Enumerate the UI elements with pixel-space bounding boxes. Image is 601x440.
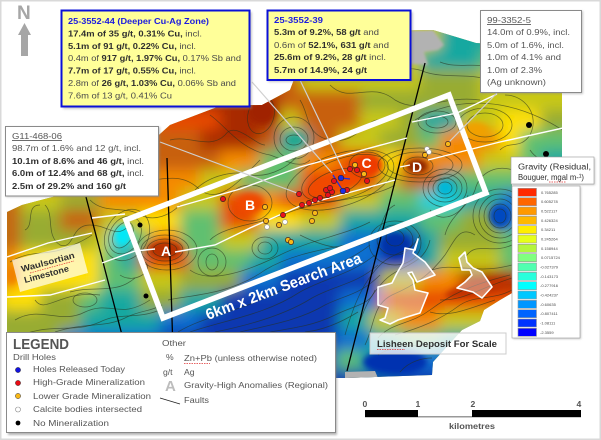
callout: 99-3352-5: 14.0m of 0.9%, incl. [487,27,570,37]
Lisheen label [370,333,506,354]
legend panel [6,332,337,435]
callout: G11-468-06 [6,126,160,197]
gravity anomaly labels: D [412,159,422,175]
drill holes key: High-Grade Mineralization [33,377,145,387]
drill holes key: Drill Holes [13,352,56,362]
Waulsortian Limestone label [12,243,88,292]
callout: 25-3552-44: 7.6m of 13 g/t, 0.41% Cu [68,90,172,100]
callout: 25-3552-39: 5.7m of 14.9%, 24 g/t [274,65,367,75]
north arrow [17,3,31,56]
callout: 25-3552-39: 25.6m of 9.2%, 28 g/t incl. [274,52,386,62]
callout: G11-468-06: G11-468-06 [12,131,62,141]
gravity colour scale: -2.3559 [540,330,554,335]
gravity colour scale: -0.143173 [540,274,559,279]
other key: g/t [163,367,173,377]
gravity colour scale: 0.34211 [541,227,556,232]
contour lines [10,62,562,372]
callout: G11-468-06: 2.5m of 29.2% and 160 g/t [12,181,126,191]
colour field [7,30,562,378]
blue drill traces [333,175,350,191]
gravity legend title: Gravity (Residual, [518,162,591,172]
other key [160,338,328,405]
callout: 25-3552-44: 5.1m of 91 g/t, 0.22% Cu, incl. [68,41,196,51]
callout: 25-3552-44: 0.4m of 917 g/t, 1.97% Cu, 0.17% Sb and [68,53,241,63]
gravity colour scale: 0.605278 [541,199,558,204]
gravity colour scale: -0.807411 [540,311,558,316]
gravity colour scale: -0.60635 [540,302,557,307]
scale bar: 4 [576,399,582,409]
gravity colour scale: -0.424237 [540,292,559,298]
gravity colour scale: -0.277916 [540,283,559,288]
other key: % [166,352,174,362]
callout: G11-468-06: 6.0m of 12.4% and 68 g/t, incl. [12,168,144,178]
callout: 25-3552-39: 5.3m of 9.2%, 58 g/t and [274,27,379,37]
callout: 25-3552-44: 17.4m of 35 g/t, 0.31% Cu, incl. [68,28,202,38]
gravity colour scale: -1.08111 [540,320,556,326]
other key: Faults [184,395,209,405]
gravity hot and cold spots [6,100,513,375]
gravity anomaly labels: C [362,155,372,171]
callout: 25-3552-39 [268,10,413,82]
callout: G11-468-06: 98.7m of 1.6% and 12 g/t, incl. [12,143,141,153]
callout: 25-3552-44: 7.7m of 17 g/t, 0.55% Cu, incl. [68,66,196,76]
other key: Gravity-High Anomalies (Regional) [184,380,328,390]
gravity colour scale: 0.765285 [541,190,558,195]
Waulsortian Limestone label: Waulsortian [20,250,76,274]
north arrow: N [17,3,31,24]
gravity colour scale: 0.426324 [541,218,558,223]
gravity colour scale: -0.027379 [540,264,559,270]
gravity colour scale [512,186,581,339]
other key: Zn+Pb (unless otherwise noted) [184,353,317,363]
drill holes key [13,352,151,428]
Lisheen label: Lisheen Deposit For Scale [377,339,497,350]
Waulsortian limestone white boundaries [7,94,563,297]
search area rectangle [126,95,486,318]
legend heading: LEGEND [13,337,69,353]
grey no-data wedge [412,30,445,66]
callout: 25-3552-44 [62,10,252,109]
drill hole markers [138,122,549,298]
drill holes key: No Mineralization [33,418,109,428]
callout: G11-468-06: 10.1m of 8.6% and 46 g/t, incl. [12,156,144,166]
callout: 25-3552-39: 0.6m of 52.1%, 631 g/t and [274,40,389,50]
scale bar: 1 [416,399,420,409]
gravity anomaly labels: A [161,243,171,259]
callout: 25-3552-44: 25-3552-44 (Deeper Cu-Ag Zone) [68,16,209,26]
gravity anomaly labels: B [245,197,255,213]
callout: 25-3552-44: 2.8m of 26 g/t, 1.03% Cu, 0.06% Sb and [68,78,236,88]
gravity anomaly labels [161,155,422,259]
no-data strip at SE [345,371,378,378]
gravity map [7,30,562,378]
other key: A [165,378,176,395]
search area label: 6km x 2km Search Area [203,250,364,324]
scale bar: 0 [362,399,368,409]
gravity colour scale: 0.158944 [541,246,558,251]
callout: 99-3352-5: 5.0m of 1.6%, incl. [487,40,564,50]
drill holes key: Calcite bodies intersected [33,404,142,414]
callout: 99-3352-5: 99-3352-5 [487,15,531,25]
gravity legend title [511,157,595,185]
Lisheen deposit outlines [378,239,492,324]
drill holes key: Holes Released Today [33,364,126,374]
other key: Ag [184,367,195,377]
leader lines [160,80,497,193]
drill holes key: Lower Grade Mineralization [33,391,151,401]
callout: 99-3352-5: 1.0m of 4.1% and [487,52,561,62]
scale bar [362,399,582,431]
callout: 99-3352-5: 1.0m of 2.3% [487,65,542,75]
fault lines [86,63,425,371]
gravity legend title: Bouguer, mgal m-¹) [518,172,584,182]
other key: Other [162,338,186,348]
scale bar: kilometres [449,421,495,431]
callout: 99-3352-5: (Ag unknown) [487,77,546,87]
scale bar: 2 [470,399,476,409]
gravity colour scale: 0.0715724 [541,255,561,260]
callout: 25-3552-39: 25-3552-39 [274,15,323,25]
callout: 99-3352-5 [480,10,583,94]
gravity colour scale: 0.245264 [541,236,558,242]
Waulsortian Limestone label: Limestone [23,263,70,285]
gravity colour scale: 0.522117 [541,208,558,214]
